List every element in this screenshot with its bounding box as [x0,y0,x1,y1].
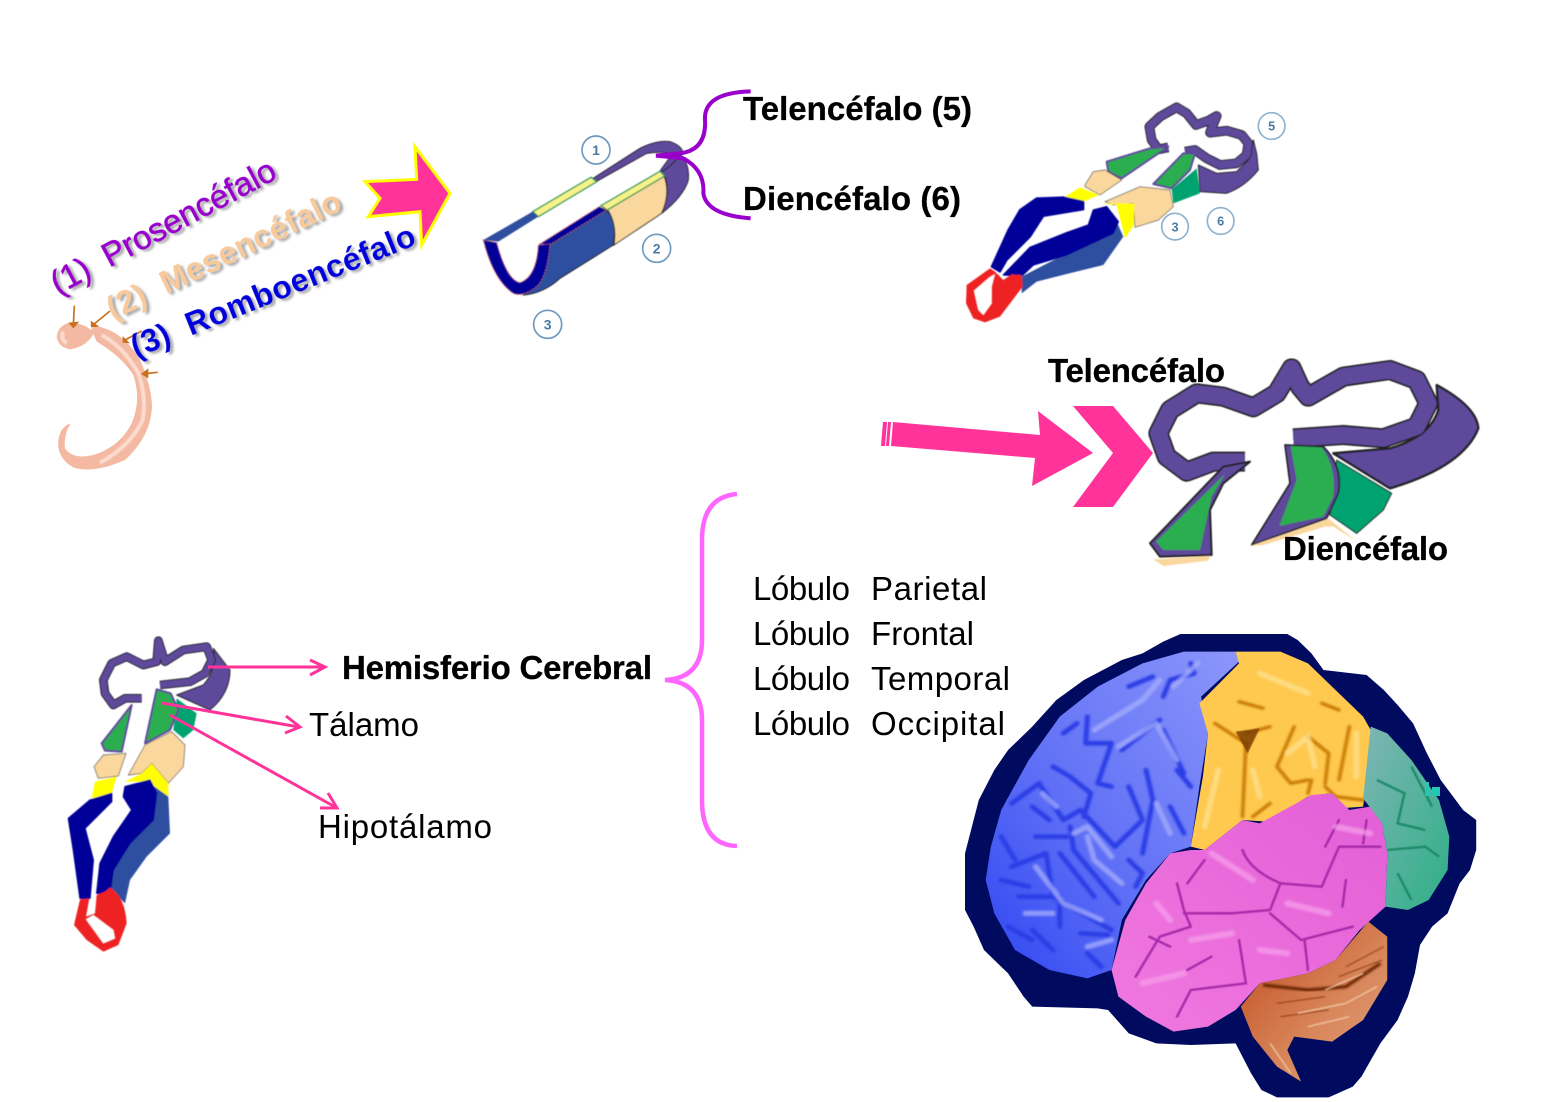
lobe: Parietal [753,570,987,607]
occipital lobe teal [1363,727,1449,910]
lobe: Temporal: Temporal [871,660,1010,697]
lobe: Occipital: Occipital [871,705,1005,742]
arrow: pink with yellow border [365,147,450,245]
purple brace [656,91,751,218]
small teal fragment [1425,782,1440,796]
arrow: to Hipotálamo [170,715,337,808]
number badge 5 [1258,113,1285,139]
lobe: Occipital: Lóbulo [753,705,850,742]
lobe: Parietal: Parietal [871,570,987,607]
embryo neural tube illustration [57,306,158,469]
number badge 3: 3 [544,316,552,332]
heading: Diencéfalo: Diencéfalo [1283,530,1448,567]
label: Hemisferio Cerebral: Hemisferio Cerebral [342,649,652,686]
number badge 1: 1 [592,142,600,158]
number badge 3 [1162,213,1188,240]
label: (1) Prosencéfalo: (1) Prosencéfalo [44,151,282,301]
lobe: Frontal: Frontal [871,615,974,652]
lobe: Frontal: Lóbulo [753,615,850,652]
lobe: Parietal: Lóbulo [753,570,850,607]
cerebellum brown [1241,922,1387,1082]
label: (3) Romboencéfalo: (3) Romboencéfalo [125,217,420,364]
temporal lobe pink [1112,793,1387,1032]
number badge 1 [582,136,610,164]
diagram: five-vesicle stage [966,107,1285,322]
label: Tálamo: Tálamo [309,706,419,743]
number badge 5: 5 [1268,120,1275,134]
parietal lobe yellow [1191,652,1371,850]
arrow: to Hemisferio Cerebral [208,660,325,675]
heading: Diencéfalo (6): Diencéfalo (6) [743,180,961,217]
lobe: Temporal [753,660,1010,697]
label: Hipotálamo: Hipotálamo [318,808,492,845]
lobe: Temporal: Lóbulo [753,660,850,697]
lobe: Occipital [753,705,1005,742]
arrow: to Tálamo [162,703,300,733]
brace: pink lobes [665,494,737,846]
frontal lobe blue [986,652,1239,978]
brain navy silhouette [965,634,1476,1097]
number badge 6: 6 [1217,215,1224,229]
heading: Telencéfalo (5): Telencéfalo (5) [743,90,972,127]
arrow: large pink arrow [881,411,1093,486]
number badge 2: 2 [653,240,661,256]
number badge 6 [1207,208,1234,234]
chevron: pink [1073,406,1153,507]
list: cerebral lobes [753,570,1010,742]
number badge 3 [534,310,562,338]
label: (2) Mesencéfalo: (2) Mesencéfalo [100,183,347,326]
illustration: brain with coloured lobes [965,634,1476,1097]
heading: Telencéfalo: Telencéfalo [1048,352,1225,389]
lobe: Frontal [753,615,974,652]
diagram: three-part neural tube [483,136,689,338]
diagram: labelled brain vesicles [68,641,230,952]
number badge 3: 3 [1171,220,1179,234]
number badge 2 [643,234,671,262]
diagram: enlarged telencephalon and diencephalon [1150,368,1478,566]
